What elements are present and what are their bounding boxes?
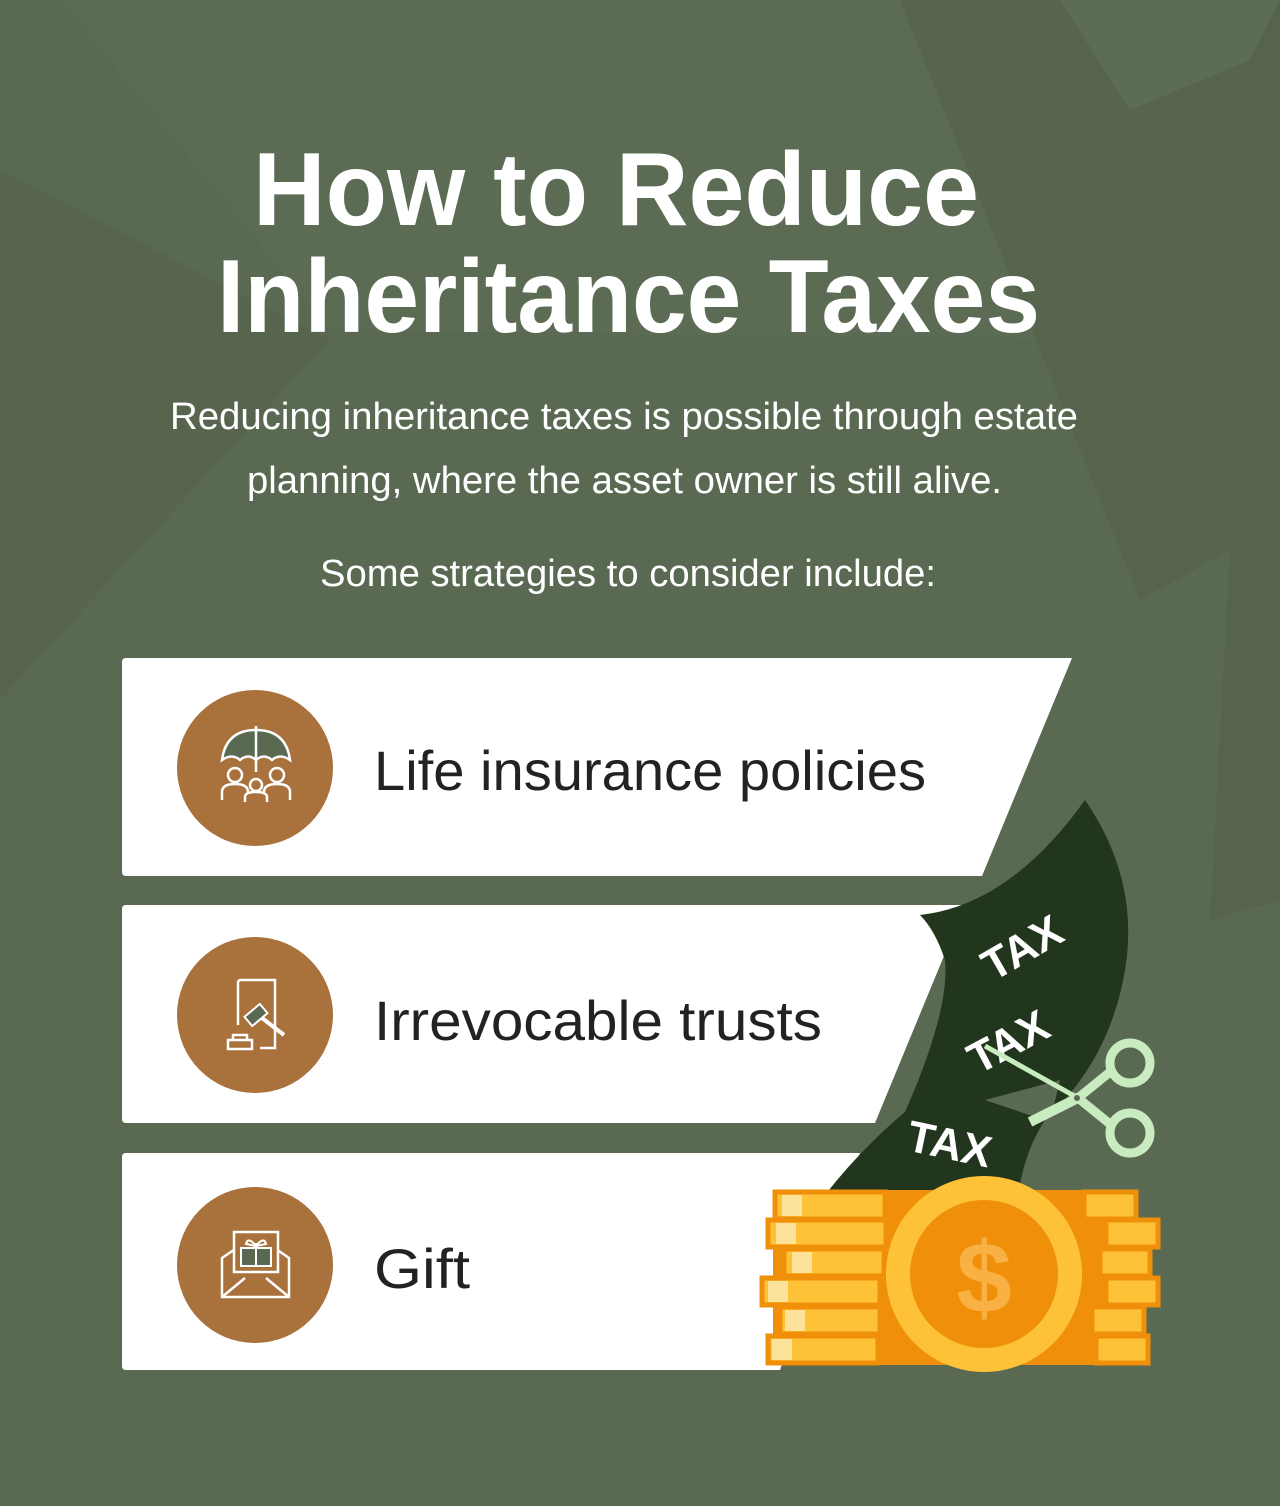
- subtitle: [170, 396, 1078, 502]
- icon: umbrella family: [177, 690, 333, 846]
- icon: document gavel: [177, 937, 333, 1093]
- title: Inheritance Taxes: [217, 239, 1040, 355]
- intro text: Some strategies to consider include:: [320, 553, 936, 595]
- icon: gift envelope: [177, 1187, 333, 1343]
- title: [217, 132, 1040, 355]
- illustration: tax ribbon: TAX: [960, 1001, 1058, 1084]
- title: How to Reduce: [253, 132, 979, 248]
- illustration: coins: $: [956, 1222, 1012, 1334]
- illustration: tax ribbon: TAX: [903, 1112, 996, 1177]
- panel: irrevocable trusts: [122, 905, 965, 1123]
- subtitle: Reducing inheritance taxes is possible through estate: [170, 396, 1078, 438]
- illustration: tax ribbon: TAX: [974, 906, 1071, 991]
- illustration: coins: [762, 1176, 1158, 1372]
- label: Gift: [374, 1237, 470, 1300]
- label: Life insurance policies: [374, 739, 926, 802]
- panel: gift: [122, 1153, 860, 1370]
- illustration: tax ribbon: [825, 800, 1128, 1195]
- subtitle: planning, where the asset owner is still alive.: [247, 460, 1002, 502]
- icon: dollar coin: [886, 1176, 1082, 1372]
- icon: scissors: [985, 1043, 1150, 1153]
- panel: life insurance: [122, 658, 1072, 876]
- label: Irrevocable trusts: [374, 989, 822, 1052]
